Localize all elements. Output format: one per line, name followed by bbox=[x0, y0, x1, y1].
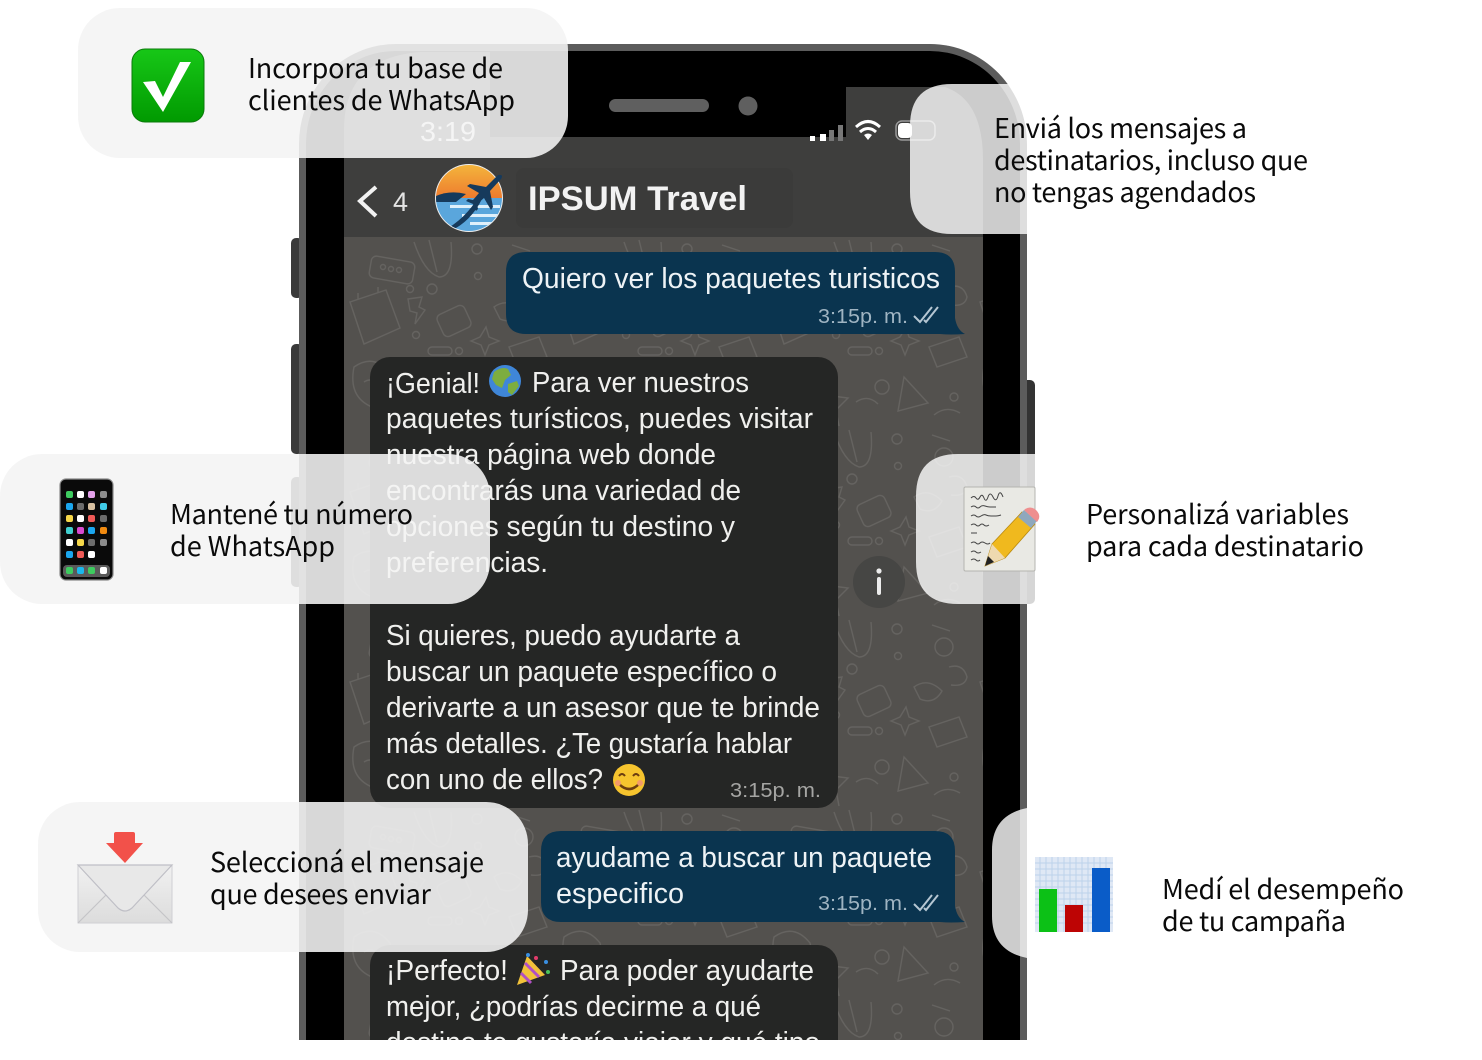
unread count: 4 bbox=[393, 187, 408, 217]
text: Enviá los mensajes a bbox=[994, 107, 1247, 146]
status clock: 3:19 bbox=[420, 116, 476, 147]
incoming message 1: opciones según tu destino y bbox=[386, 511, 735, 543]
avatar: IPSUM Travel logo bbox=[435, 164, 503, 232]
incoming message 1: más detalles. ¿Te gustaría hablar bbox=[386, 728, 792, 760]
panel: seleccioná mensaje bbox=[38, 802, 528, 952]
outgoing message 1: 3:15p. m. bbox=[818, 306, 908, 328]
phone frame bbox=[299, 44, 1027, 1060]
icon: party popper emoji bbox=[517, 953, 550, 985]
incoming message 2 bbox=[370, 945, 838, 1040]
icon: note and pencil bbox=[964, 487, 1039, 571]
outgoing message 2 bbox=[541, 831, 965, 922]
panel: enviá mensajes bbox=[910, 84, 1308, 234]
panel: mantené número bbox=[0, 454, 490, 604]
incoming message 1: Para ver nuestros bbox=[532, 367, 749, 399]
incoming message 1: encontrarás una variedad de bbox=[386, 475, 741, 507]
icon: smartphone bbox=[60, 479, 113, 580]
incoming message 1: derivarte a un asesor que te brinde bbox=[386, 692, 820, 724]
right side button bbox=[1027, 380, 1035, 604]
outgoing message 1 bbox=[506, 252, 965, 334]
text: clientes de WhatsApp bbox=[248, 79, 515, 118]
panel: incorpora base de clientes bbox=[78, 8, 568, 158]
text: no tengas agendados bbox=[994, 171, 1256, 210]
panel: medí desempeño bbox=[992, 808, 1404, 958]
icon: bar chart bbox=[1035, 857, 1113, 932]
text bbox=[171, 500, 412, 562]
text: destinatarios, incluso que bbox=[994, 139, 1308, 178]
status icons bbox=[810, 121, 935, 141]
contact name: IPSUM Travel bbox=[528, 180, 747, 218]
panel: personalizá variables bbox=[916, 454, 1364, 604]
text: Incorpora tu base de bbox=[248, 47, 503, 86]
outgoing message 1: Quiero ver los paquetes turisticos bbox=[522, 263, 940, 295]
icon: envelope with arrow bbox=[78, 832, 172, 923]
incoming message 1: nuestra página web donde bbox=[386, 439, 716, 471]
text bbox=[1088, 500, 1363, 562]
text bbox=[211, 848, 483, 910]
camera bbox=[738, 96, 758, 116]
text bbox=[994, 107, 1308, 210]
icon: smiling emoji bbox=[613, 764, 645, 796]
incoming message 2: mejor, ¿podrías decirme a qué bbox=[386, 991, 761, 1023]
text: Medí el desempeño bbox=[1162, 868, 1404, 907]
text bbox=[1162, 868, 1404, 939]
chat wallpaper bbox=[344, 237, 983, 1060]
incoming message 1: ¡Genial! bbox=[386, 368, 480, 400]
speaker bbox=[609, 99, 709, 112]
incoming message 2: Para poder ayudarte bbox=[560, 955, 814, 987]
title backdrop bbox=[516, 168, 793, 228]
text: para cada destinatario bbox=[1086, 525, 1364, 564]
outgoing message 2: ayudame a buscar un paquete bbox=[556, 842, 932, 874]
text: de tu campaña bbox=[1162, 900, 1346, 939]
phone mockup bbox=[291, 44, 1035, 1060]
incoming message 1: Si quieres, puedo ayudarte a bbox=[386, 620, 741, 652]
outgoing message 2: 3:15p. m. bbox=[818, 893, 908, 915]
speaker notch bbox=[490, 51, 846, 137]
incoming message 2: ¡Perfecto! bbox=[386, 955, 508, 987]
text bbox=[249, 56, 514, 116]
icon: green check bbox=[132, 49, 204, 122]
icon: globe emoji bbox=[489, 365, 521, 397]
back arrow bbox=[360, 187, 376, 216]
left side buttons bbox=[291, 238, 299, 587]
incoming message 2: destino te gustaría viajar y qué tipo bbox=[386, 1027, 820, 1059]
text: Seleccioná el mensaje bbox=[210, 841, 484, 880]
phone bezel bbox=[306, 51, 1020, 1060]
incoming message 1: preferencias. bbox=[386, 547, 548, 579]
text: Personalizá variables bbox=[1086, 493, 1349, 532]
incoming message 1: paquetes turísticos, puedes visitar bbox=[386, 403, 813, 435]
text: Mantené tu número bbox=[170, 493, 413, 532]
text: que desees enviar bbox=[210, 873, 432, 912]
info button bbox=[853, 556, 905, 608]
incoming message 1 bbox=[370, 357, 838, 808]
incoming message 1: 3:15p. m. bbox=[730, 780, 821, 802]
incoming message 1: buscar un paquete específico o bbox=[386, 656, 777, 688]
incoming message 1: con uno de ellos? bbox=[386, 764, 603, 796]
text: de WhatsApp bbox=[170, 525, 335, 564]
outgoing message 2: especifico bbox=[556, 878, 684, 910]
app header background bbox=[344, 87, 983, 237]
